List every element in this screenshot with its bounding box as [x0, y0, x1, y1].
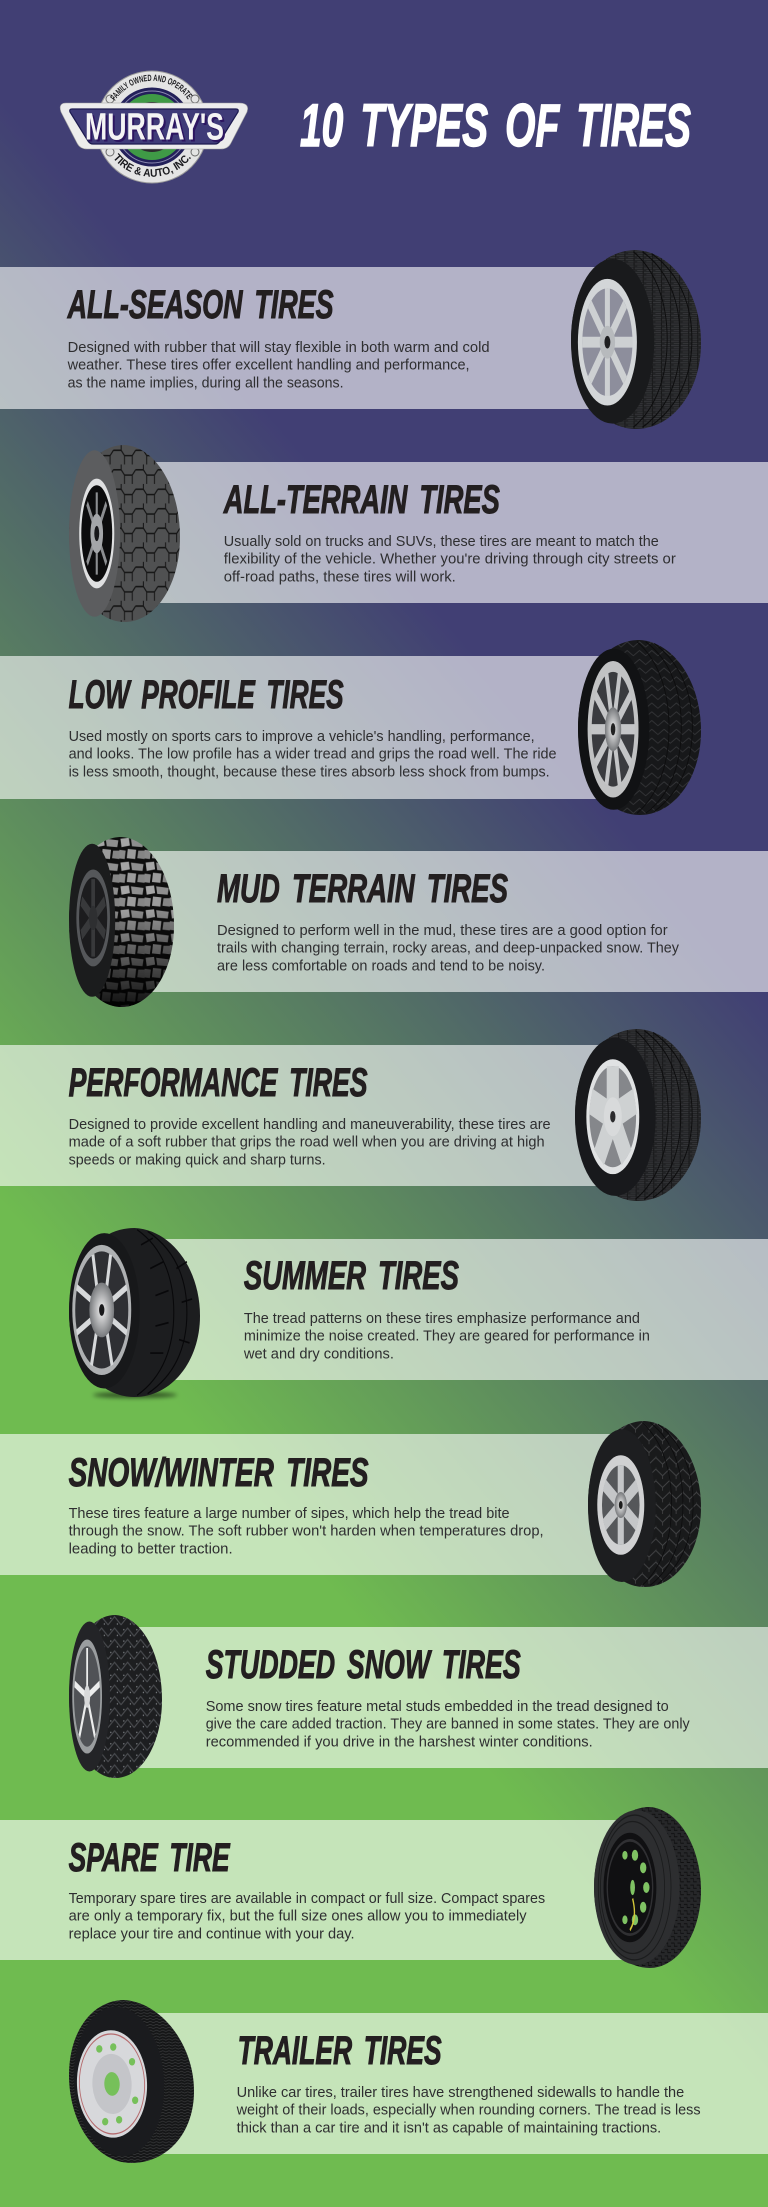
heading: snow/winter tires: SNOW/WINTER TIRES: [69, 1451, 369, 1495]
text block: summer tires: [243, 1311, 650, 1362]
text block: snow/winter tires: These tires feature a large number of sipes, which help the tread bite: [69, 1506, 510, 1522]
heading: trailer tires: TRAILER TIRES: [238, 2029, 442, 2073]
text block: performance tires: [69, 1117, 551, 1168]
logo: Murray's Tire & Auto: [60, 70, 248, 184]
heading: mud terrain tires: MUD TERRAIN TIRES: [217, 867, 508, 911]
text block: low profile tires: Used mostly on sports cars to improve a vehicle's handling, performance,: [69, 729, 535, 745]
text block: trailer tires: [236, 2085, 701, 2136]
icon: snow/winter tire: [588, 1421, 701, 1587]
heading: summer tires: SUMMER TIRES: [244, 1254, 459, 1298]
heading: spare tire: SPARE TIRE: [69, 1836, 230, 1880]
text block: trailer tires: Unlike car tires, trailer tires have strengthened sidewalls to handle the: [237, 2085, 684, 2101]
text block: summer tires: minimize the noise created. They are geared for performance in: [244, 1329, 650, 1345]
text block: snow/winter tires: [69, 1506, 544, 1557]
heading: all-season tires: ALL-SEASON TIRES: [67, 283, 334, 327]
text block: spare tire: replace your tire and continue with your day.: [69, 1926, 355, 1942]
icon: studded snow tire: [69, 1615, 162, 1778]
text block: trailer tires: weight of their loads, especially when rounding corners. The tread is less: [236, 2103, 701, 2119]
text block: performance tires: speeds or making quick and sharp turns.: [69, 1152, 326, 1168]
icon: performance tire: [575, 1029, 701, 1201]
text block: trailer tires: thick than a car tire and it isn't as capable of maintaining tractions.: [237, 2120, 661, 2136]
icon: trailer tire: [66, 1999, 194, 2164]
panel: all-terrain tires: [69, 445, 768, 622]
text block: studded snow tires: [206, 1699, 690, 1750]
logo: Murray's Tire & Auto: TIRE & AUTO, INC.: [114, 153, 191, 177]
icon: low profile tire: [578, 640, 701, 815]
panel: spare tire: [0, 1807, 701, 1968]
text block: mud terrain tires: Designed to perform well in the mud, these tires are a good option for: [217, 923, 668, 939]
text block: low profile tires: and looks. The low profile has a wider tread and grips the road well. The ride: [69, 747, 557, 763]
panel: mud terrain tires: [69, 837, 768, 1007]
panel: performance tires: [0, 1029, 701, 1201]
text block: low profile tires: is less smooth, thought, because these tires absorb less shock from bumps.: [69, 764, 550, 780]
text block: mud terrain tires: [217, 923, 680, 974]
heading: performance tires: PERFORMANCE TIRES: [69, 1061, 368, 1105]
panel: trailer tires: [66, 1999, 768, 2164]
heading: low profile tires: LOW PROFILE TIRES: [69, 673, 344, 717]
heading: all-terrain tires: ALL-TERRAIN TIRES: [223, 478, 500, 522]
icon: summer tire: [69, 1228, 200, 1398]
text block: spare tire: Temporary spare tires are available in compact or full size. Compact spares: [69, 1891, 545, 1907]
text block: mud terrain tires: are less comfortable on roads and tend to be noisy.: [217, 958, 545, 974]
panel: summer tires: [69, 1228, 768, 1398]
text block: all-terrain tires: Usually sold on trucks and SUVs, these tires are meant to match the: [224, 534, 659, 550]
text block: spare tire: are only a temporary fix, but the full size ones allow you to immediately: [69, 1909, 527, 1925]
logo: Murray's Tire & Auto: MURRAY'S: [85, 106, 224, 148]
panel: snow/winter tires: [0, 1421, 701, 1587]
icon: all-terrain tire: [69, 445, 180, 622]
text block: snow/winter tires: through the snow. The soft rubber won't harden when temperatures drop,: [69, 1524, 544, 1540]
text block: summer tires: The tread patterns on these tires emphasize performance and: [244, 1311, 640, 1327]
text block: studded snow tires: Some snow tires feature metal studs embedded in the tread designed to: [206, 1699, 669, 1715]
text block: mud terrain tires: trails with changing terrain, rocky areas, and deep-unpacked snow. They: [217, 941, 680, 957]
icon: spare tire: [594, 1807, 701, 1968]
panel: studded snow tires: [69, 1615, 768, 1778]
text block: studded snow tires: give the care added traction. They are banned in some states. They are only: [206, 1717, 690, 1733]
text block: low profile tires: [69, 729, 557, 780]
text block: all-terrain tires: [224, 534, 676, 585]
text block: all-season tires: [67, 340, 490, 391]
heading: studded snow tires: STUDDED SNOW TIRES: [206, 1643, 521, 1687]
text block: studded snow tires: recommended if you drive in the harshest winter conditions.: [206, 1734, 593, 1750]
text block: all-terrain tires: flexibility of the vehicle. Whether you're driving through city streets or: [224, 552, 676, 568]
text block: all-season tires: Designed with rubber that will stay flexible in both warm and cold: [68, 340, 490, 356]
text block: all-season tires: as the name implies, during all the seasons.: [68, 375, 344, 391]
icon: mud terrain tire: [69, 837, 174, 1007]
text block: performance tires: made of a soft rubber that grips the road well when you are driving at high: [69, 1135, 545, 1151]
text block: all-terrain tires: off-road paths, these tires will work.: [224, 569, 456, 585]
text block: all-season tires: weather. These tires offer excellent handling and performance,: [67, 358, 470, 374]
text block: summer tires: wet and dry conditions.: [243, 1346, 394, 1362]
text block: spare tire: [69, 1891, 545, 1942]
icon: all-season tire: [571, 250, 701, 429]
panel: all-season tires: [0, 250, 701, 429]
text block: performance tires: Designed to provide excellent handling and maneuverability, these tires are: [69, 1117, 551, 1133]
panel: low profile tires: [0, 640, 701, 815]
text block: snow/winter tires: leading to better traction.: [69, 1541, 233, 1557]
